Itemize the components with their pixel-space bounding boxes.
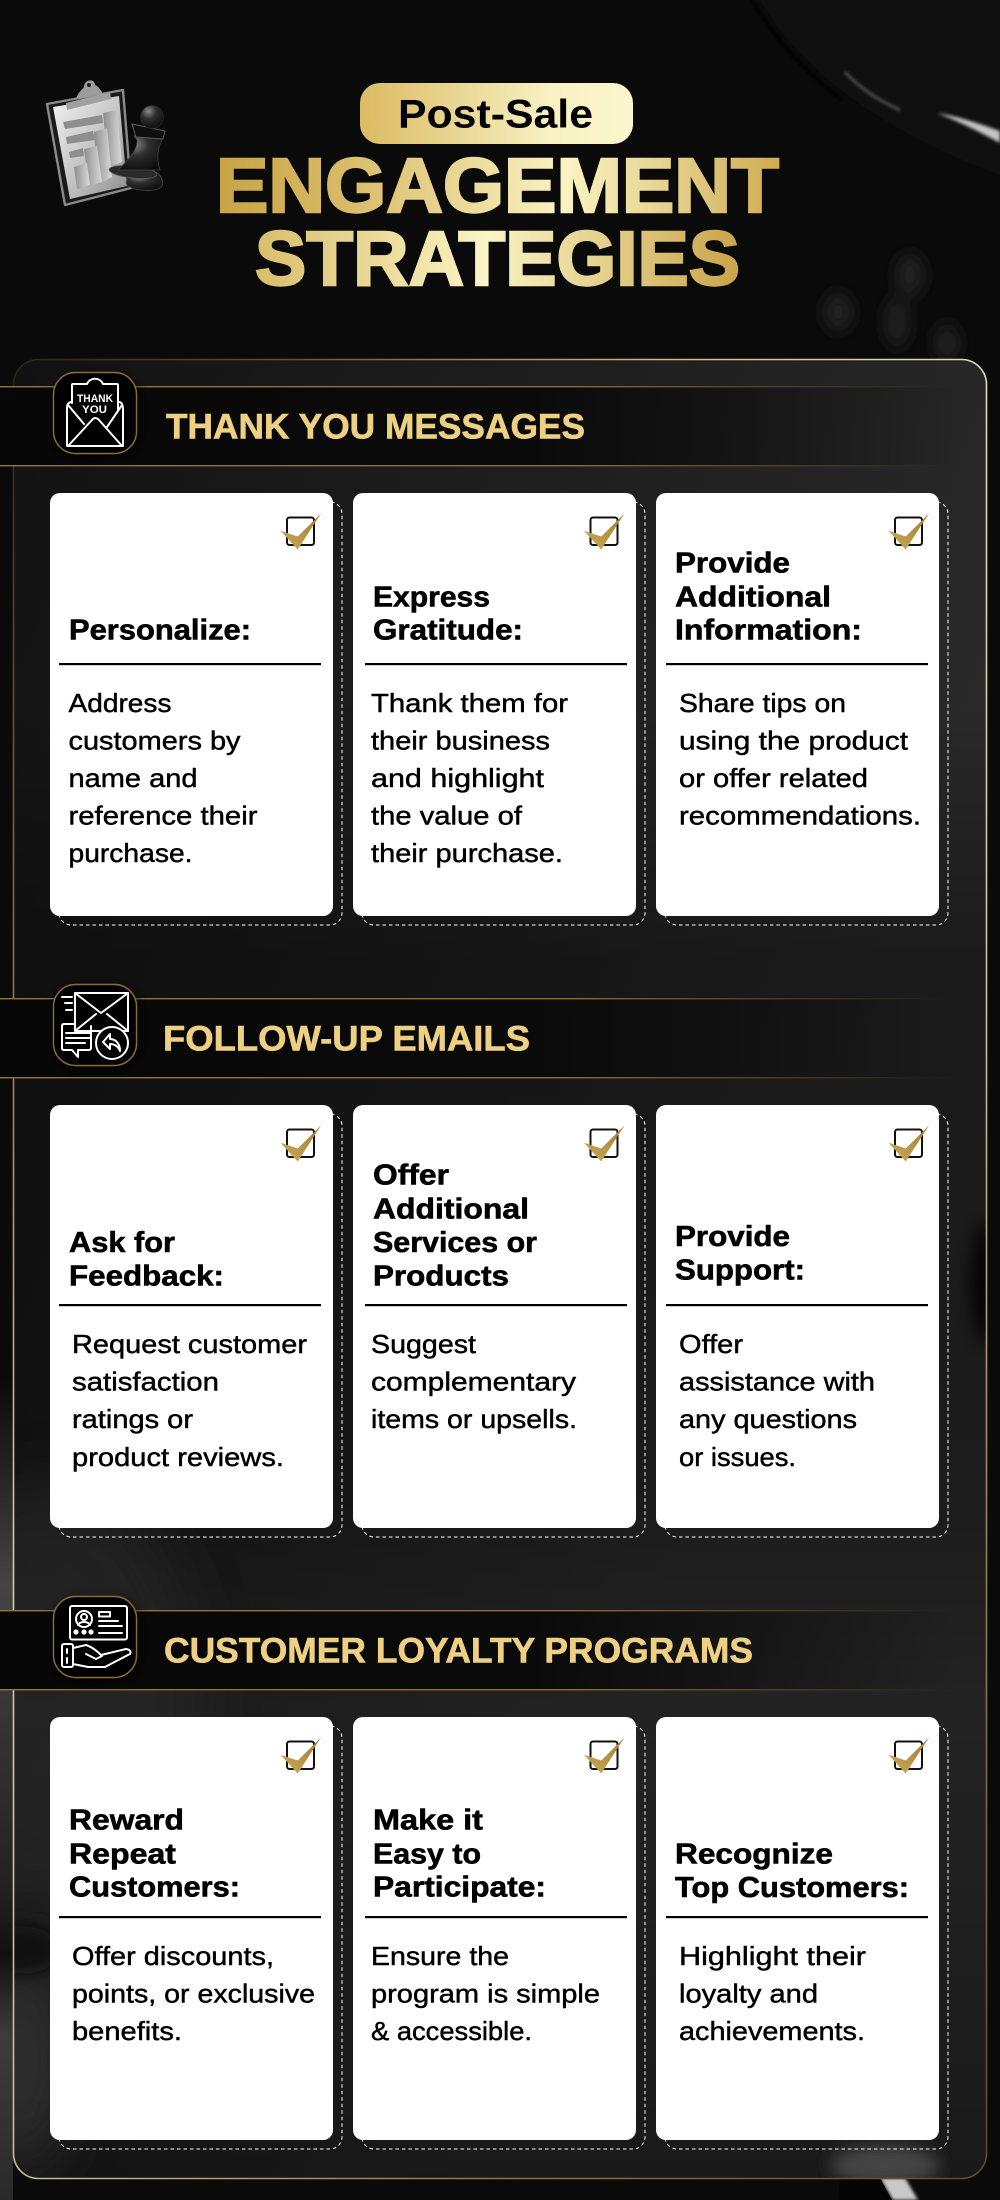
card: Provide Support: Support: bbox=[675, 1254, 805, 1286]
card: Offer Additional Services or Products: Suggest bbox=[371, 1329, 477, 1359]
card: Provide Additional Information: Additional bbox=[675, 582, 831, 614]
card: Personalize bbox=[50, 493, 342, 925]
card: Ask for Feedback: satisfaction bbox=[72, 1366, 219, 1396]
card: Provide Support bbox=[656, 1105, 948, 1537]
icon: thank you envelope: YOU bbox=[82, 404, 107, 416]
title: ENGAGEMENT STRATEGIES: ENGAGEMENT bbox=[216, 143, 779, 229]
card: Reward Repeat Customers: points, or exclusive bbox=[72, 1978, 315, 2008]
card: Recognize Top Customers: loyalty and bbox=[679, 1978, 818, 2008]
card: Recognize Top Customers: Recognize bbox=[675, 1838, 833, 1870]
card: Offer Additional Services or Products: Services or bbox=[373, 1227, 537, 1259]
card: Express Gratitude: Gratitude: bbox=[373, 614, 523, 646]
card: Make it Easy to Participate: Participate: bbox=[373, 1872, 546, 1904]
card: Express Gratitude bbox=[353, 493, 645, 925]
card: Personalize: purchase. bbox=[68, 838, 192, 868]
section 1 header band bbox=[0, 372, 960, 466]
icon: thank you envelope bbox=[54, 372, 136, 454]
card: Provide Support: Offer bbox=[679, 1329, 743, 1359]
card: Recognize Top Customers: achievements. bbox=[679, 2016, 865, 2046]
section heading: follow-up emails: FOLLOW-UP EMAILS bbox=[163, 1020, 530, 1058]
card: Make it Easy to Participate bbox=[353, 1717, 645, 2149]
card: Make it Easy to Participate: Ensure the bbox=[371, 1941, 509, 1971]
card: Ask for Feedback bbox=[50, 1105, 342, 1537]
card: Ask for Feedback: product reviews. bbox=[72, 1442, 284, 1472]
bottom and left light streaks bbox=[0, 1380, 13, 2200]
background bokeh bbox=[824, 253, 959, 363]
card: Express Gratitude: their purchase. bbox=[371, 838, 563, 868]
card: Make it Easy to Participate: Easy to bbox=[373, 1838, 481, 1870]
title: ENGAGEMENT STRATEGIES: STRATEGIES bbox=[255, 216, 740, 302]
card: Express Gratitude: Express bbox=[373, 582, 490, 614]
card: Recognize Top Customers: Top Customers: bbox=[675, 1872, 909, 1904]
card: Express Gratitude: the value of bbox=[371, 800, 523, 830]
card: Reward Repeat Customers: Offer discounts, bbox=[72, 1941, 274, 1971]
card: Offer Additional Services or Products bbox=[353, 1105, 645, 1537]
card: Recognize Top Customers: Highlight their bbox=[679, 1941, 866, 1971]
card: Ask for Feedback: ratings or bbox=[72, 1404, 193, 1434]
card: Provide Support: any questions bbox=[679, 1404, 857, 1434]
card: Reward Repeat Customers: benefits. bbox=[72, 2016, 182, 2046]
card: Provide Additional Information: recommendations. bbox=[679, 800, 921, 830]
card: Personalize: Address bbox=[68, 688, 172, 718]
card: Provide Additional Information: Share tips on bbox=[679, 688, 846, 718]
card: Personalize: reference their bbox=[68, 800, 258, 830]
section heading: customer loyalty programs: CUSTOMER LOYALTY PROGRAMS bbox=[164, 1632, 753, 1670]
card: Provide Additional Information: using the product bbox=[679, 726, 909, 756]
card: Reward Repeat Customers: Customers: bbox=[69, 1872, 240, 1904]
card: Reward Repeat Customers: Repeat bbox=[69, 1838, 176, 1870]
section heading: thank you messages: THANK YOU MESSAGES bbox=[166, 408, 585, 446]
title: ENGAGEMENT STRATEGIES bbox=[216, 143, 779, 302]
card: Recognize Top Customers bbox=[656, 1717, 948, 2149]
card: Reward Repeat Customers: Reward bbox=[69, 1804, 184, 1836]
section 2 header band bbox=[0, 984, 960, 1078]
card: Make it Easy to Participate: Make it bbox=[373, 1804, 483, 1836]
title badge: Post-Sale bbox=[360, 83, 633, 144]
icon: loyalty card and hand bbox=[54, 1596, 136, 1678]
card: Make it Easy to Participate: & accessible. bbox=[371, 2016, 532, 2046]
card: Offer Additional Services or Products: Offer bbox=[373, 1160, 449, 1192]
title badge: Post-Sale: Post-Sale bbox=[398, 92, 593, 136]
card: Make it Easy to Participate: program is simple bbox=[371, 1978, 600, 2008]
icon: clipboard and chess pawn bbox=[47, 80, 165, 205]
icon: follow-up email bbox=[54, 984, 136, 1066]
card: Personalize: Personalize: bbox=[69, 614, 251, 646]
card: Express Gratitude: their business bbox=[371, 726, 550, 756]
card: Reward Repeat Customers bbox=[50, 1717, 342, 2149]
card: Provide Additional Information bbox=[656, 493, 948, 925]
icon: thank you envelope: THANK bbox=[77, 393, 113, 405]
card: Offer Additional Services or Products: Additional bbox=[373, 1194, 529, 1226]
top-right curved sheen bbox=[752, 0, 1000, 175]
card: Provide Additional Information: or offer related bbox=[679, 763, 868, 793]
card: Ask for Feedback: Ask for bbox=[69, 1227, 175, 1259]
card: Provide Additional Information: Provide bbox=[675, 548, 790, 580]
card: Offer Additional Services or Products: Products bbox=[373, 1260, 509, 1292]
card: Personalize: customers by bbox=[68, 726, 240, 756]
card: Personalize: name and bbox=[68, 763, 198, 793]
card: Provide Additional Information: Information: bbox=[675, 614, 862, 646]
card: Provide Support: or issues. bbox=[679, 1442, 796, 1472]
card: Ask for Feedback: Feedback: bbox=[69, 1260, 224, 1292]
card: Ask for Feedback: Request customer bbox=[72, 1329, 307, 1359]
card: Express Gratitude: and highlight bbox=[371, 763, 545, 793]
card: Offer Additional Services or Products: items or upsells. bbox=[371, 1404, 577, 1434]
card: Offer Additional Services or Products: complementary bbox=[371, 1366, 576, 1396]
section 3 header band bbox=[0, 1596, 960, 1690]
card: Provide Support: assistance with bbox=[679, 1366, 875, 1396]
card: Express Gratitude: Thank them for bbox=[371, 688, 568, 718]
card: Provide Support: Provide bbox=[675, 1221, 790, 1253]
